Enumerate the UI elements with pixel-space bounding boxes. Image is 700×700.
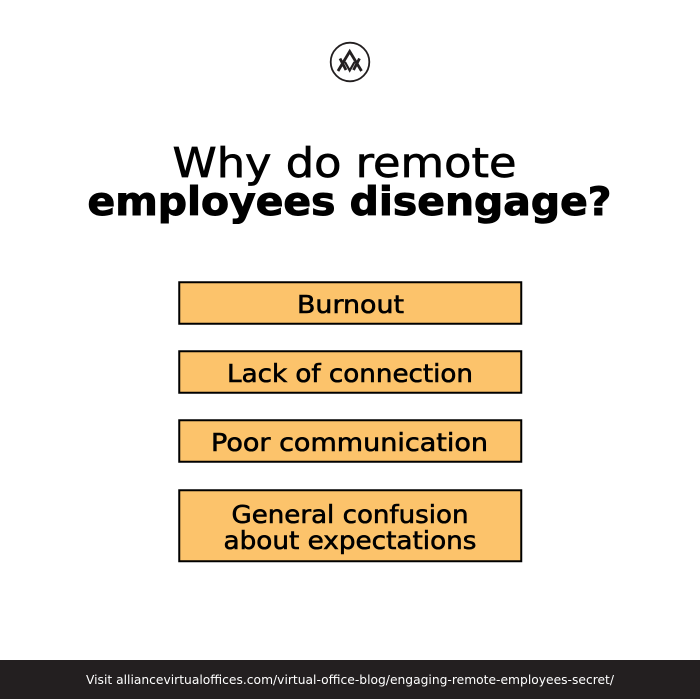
- panel: poor communication: [179, 420, 521, 462]
- footer bar: Visit alliancevirtualoffices.com/virtual-office-blog/engaging-remote-employees-secret/: [86, 672, 615, 687]
- footer bar: [0, 660, 700, 699]
- title: Why do remote: [172, 139, 516, 187]
- panel: general confusion: [179, 490, 521, 561]
- icon: logo: [331, 43, 369, 81]
- panel: burnout: [179, 282, 521, 324]
- title: [88, 139, 612, 225]
- panel: general confusion: about expectations: [224, 526, 476, 555]
- panel: lack of connection: [179, 351, 521, 393]
- panel: lack of connection: Lack of connection: [227, 359, 473, 388]
- panel: general confusion: General confusion: [232, 500, 468, 529]
- title: employees disengage?: [88, 180, 612, 225]
- panel: burnout: Burnout: [297, 290, 404, 319]
- panel: poor communication: Poor communication: [211, 428, 488, 457]
